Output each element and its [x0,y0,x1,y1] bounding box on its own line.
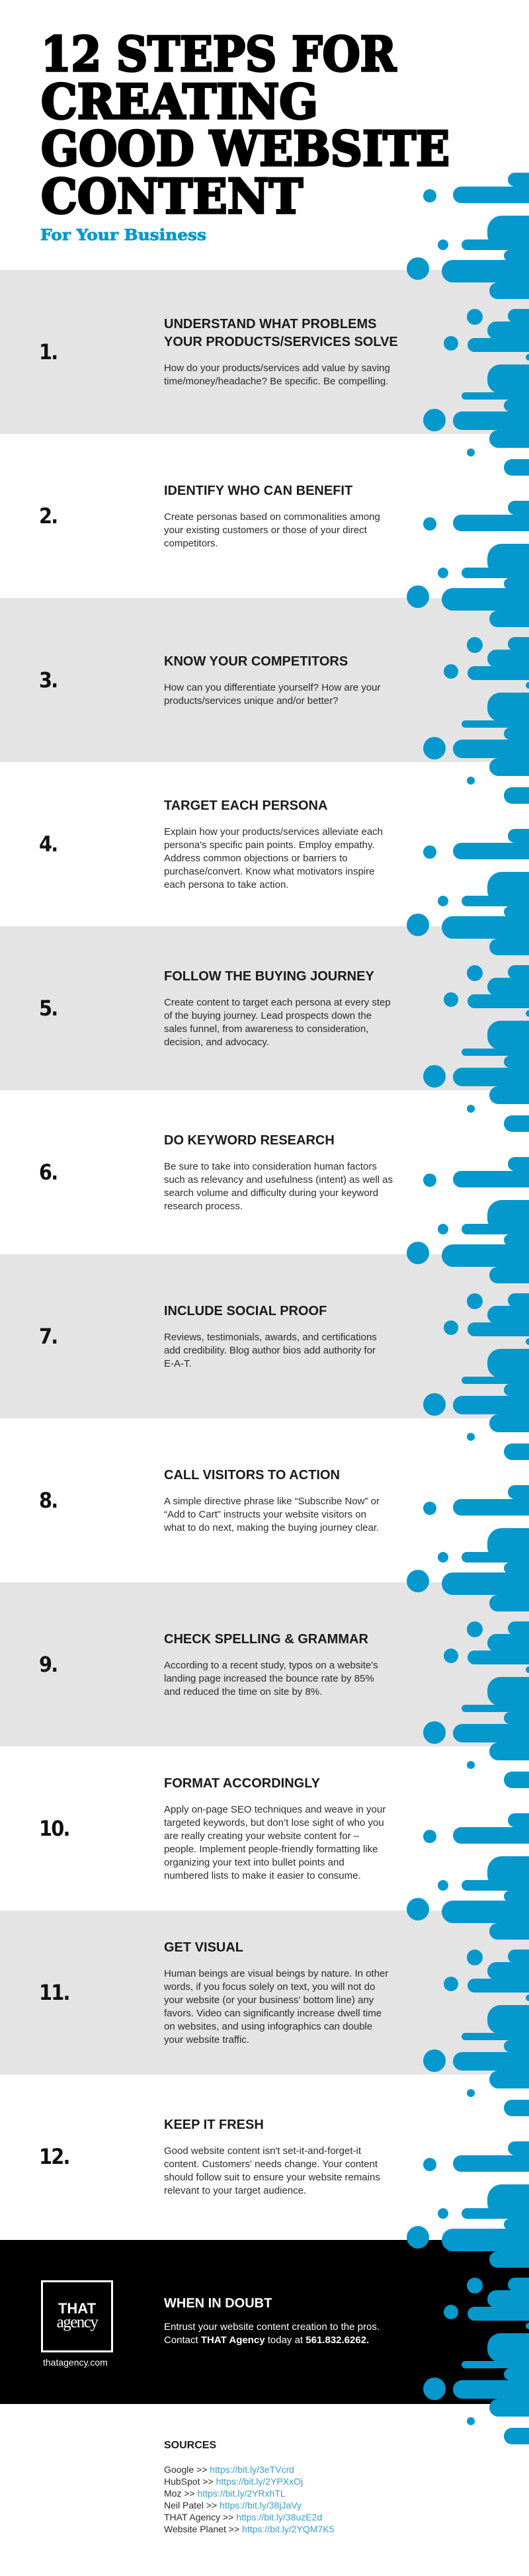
step 12 [39,2117,380,2196]
step 8: what to do next, making the buying journey clear. [164,1522,379,1533]
step 1: UNDERSTAND WHAT PROBLEMS [164,317,376,331]
step 7: E-A-T. [164,1357,192,1369]
step 10: Apply on-page SEO techniques and weave in your [164,1803,386,1815]
step 6 [39,1133,393,1212]
step 1 [0,270,529,434]
step 4: TARGET EACH PERSONA [164,798,327,812]
step 6: DO KEYWORD RESEARCH [164,1133,335,1147]
step 5: of the buying journey. Lead prospects down the [164,1009,372,1021]
step 10: organizing your text into bullet points and [164,1856,345,1868]
step 9: CHECK SPELLING & GRAMMAR [164,1631,368,1646]
step 9: landing page increased the bounce rate by 85% [164,1672,374,1684]
step 10: people. Implement people-friendly formatting like [164,1843,378,1855]
step 11 [0,1911,529,2075]
step 2 [39,483,380,549]
step 3: How can you differentiate yourself? How are your [164,681,380,693]
step 12: 12. [39,2144,69,2169]
step 4: each persona to take action. [164,879,288,890]
logo: THAT [58,2300,96,2317]
step 4 [39,798,383,890]
step 2: competitors. [164,537,218,549]
step 9: 9. [39,1652,57,1677]
step 5: FOLLOW THE BUYING JOURNEY [164,968,374,983]
sources: SOURCES [164,2440,216,2451]
step 10 [39,1776,386,1881]
step 7: 7. [39,1324,57,1349]
step 12: KEEP IT FRESH [164,2117,264,2131]
step 7: Reviews, testimonials, awards, and certifications [164,1331,377,1343]
step 1: YOUR PRODUCTS/SERVICES SOLVE [164,335,398,349]
title: CONTENT [41,168,303,224]
sources: Neil Patel >> https://bit.ly/38jJaVy [164,2500,302,2511]
header [40,26,450,244]
step 6: such as relevancy and usefulness (intent) as well as [164,1174,393,1185]
title: CREATING [41,73,318,130]
step 12: relevant to your target audience. [164,2184,306,2196]
step 8: A simple directive phrase like “Subscribe Now” or [164,1495,380,1507]
step 6: search volume and difficulty during your keyword [164,1187,378,1199]
subtitle: For Your Business [40,226,206,244]
step 4: purchase/convert. Know what motivators inspire [164,865,374,877]
step 12: Good website content isn't set-it-and-forget-it [164,2145,361,2157]
step 4: 4. [39,832,57,857]
step 7 [0,1254,529,1418]
step 2: Create personas based on commonalities among [164,511,380,523]
title: 12 STEPS FOR [41,26,397,82]
step 10: FORMAT ACCORDINGLY [164,1776,320,1790]
step 8 [39,1467,380,1533]
step 3: products/services unique and/or better? [164,695,339,707]
step 4: Address common objections or barriers to [164,852,348,864]
step 11: GET VISUAL [164,1940,243,1954]
step 5: sales funnel, from awareness to consideration, [164,1023,368,1035]
step 5 [0,926,529,1090]
step 7: add credibility. Blog author bios add authority for [164,1344,376,1356]
step 6: 6. [39,1160,57,1185]
step 12: content. Customers' needs change. Your content [164,2158,378,2170]
callout text [164,2296,380,2346]
step 8: “Add to Cart” instructs your website visitors on [164,1508,366,1520]
sources: Moz >> https://bit.ly/2YRxhTL [164,2488,286,2499]
step 11: favors. Video can significantly increase dwell time [164,2007,382,2019]
step 11: your website (or your business' bottom line) any [164,1994,374,2006]
step 11: words, if you focus solely on text, you will not do [164,1981,375,1993]
step 8: CALL VISITORS TO ACTION [164,1467,340,1482]
step 10: 10. [39,1816,69,1841]
step 5: Create content to target each persona at every step [164,996,391,1008]
step 11: Human beings are visual beings by nature. In other [164,1967,388,1979]
step 1: How do your products/services add value by saving [164,363,390,374]
step 11: 11. [39,1980,69,2005]
step 5: decision, and advocacy. [164,1036,269,1048]
step 3: 3. [39,667,57,693]
callout text: Entrust your website content creation to the pros. [164,2321,380,2333]
step 6: Be sure to take into consideration human factors [164,1160,377,1172]
logo [41,2280,113,2352]
step 7: INCLUDE SOCIAL PROOF [164,1303,327,1318]
step 9: According to a recent study, typos on a website's [164,1659,378,1671]
sources: HubSpot >> https://bit.ly/2YPXxOj [164,2476,303,2487]
callout text: WHEN IN DOUBT [164,2296,272,2311]
step 9 [0,1582,529,1746]
step 4: persona's specific pain points. Employ empathy. [164,839,375,851]
title [40,26,450,244]
step 5: 5. [39,996,57,1021]
step 10: numbered lists to make it easier to consume. [164,1869,361,1881]
step 8: 8. [39,1488,57,1513]
footer: when in doubt [0,2240,529,2404]
step 3 [0,598,529,762]
step 10: targeted keywords, but don’t lose sight of who you [164,1817,384,1828]
sources: Google >> https://bit.ly/3eTVcrd [164,2464,294,2475]
step 4: Explain how your products/services alleviate each [164,826,383,837]
step 9: and reduced the time on site by 8%. [164,1686,322,1697]
step 11: on websites, and using infographics can double [164,2020,372,2032]
callout text: Contact THAT Agency today at 561.832.6262. [164,2335,369,2346]
logo: agency [57,2313,97,2331]
step 12: should follow suit to ensure your website remains [164,2171,380,2183]
step 1: 1. [39,339,57,365]
step 3: KNOW YOUR COMPETITORS [164,654,348,668]
step 1: time/money/headache? Be specific. Be compelling. [164,376,388,387]
step 2: 2. [39,503,57,529]
step 2: your existing customers or those of your direct [164,524,367,536]
website url: thatagency.com [43,2357,108,2368]
step 6: research process. [164,1200,243,1212]
title: GOOD WEBSITE [41,120,450,177]
sources: Website Planet >> https://bit.ly/2YQM7K5 [164,2524,334,2534]
step 2: IDENTIFY WHO CAN BENEFIT [164,483,352,497]
sources: THAT Agency >> https://bit.ly/38uzE2d [164,2512,322,2522]
step 10: are really creating your website content for – [164,1830,359,1842]
sources [164,2440,334,2534]
step 11: your website traffic. [164,2034,249,2045]
